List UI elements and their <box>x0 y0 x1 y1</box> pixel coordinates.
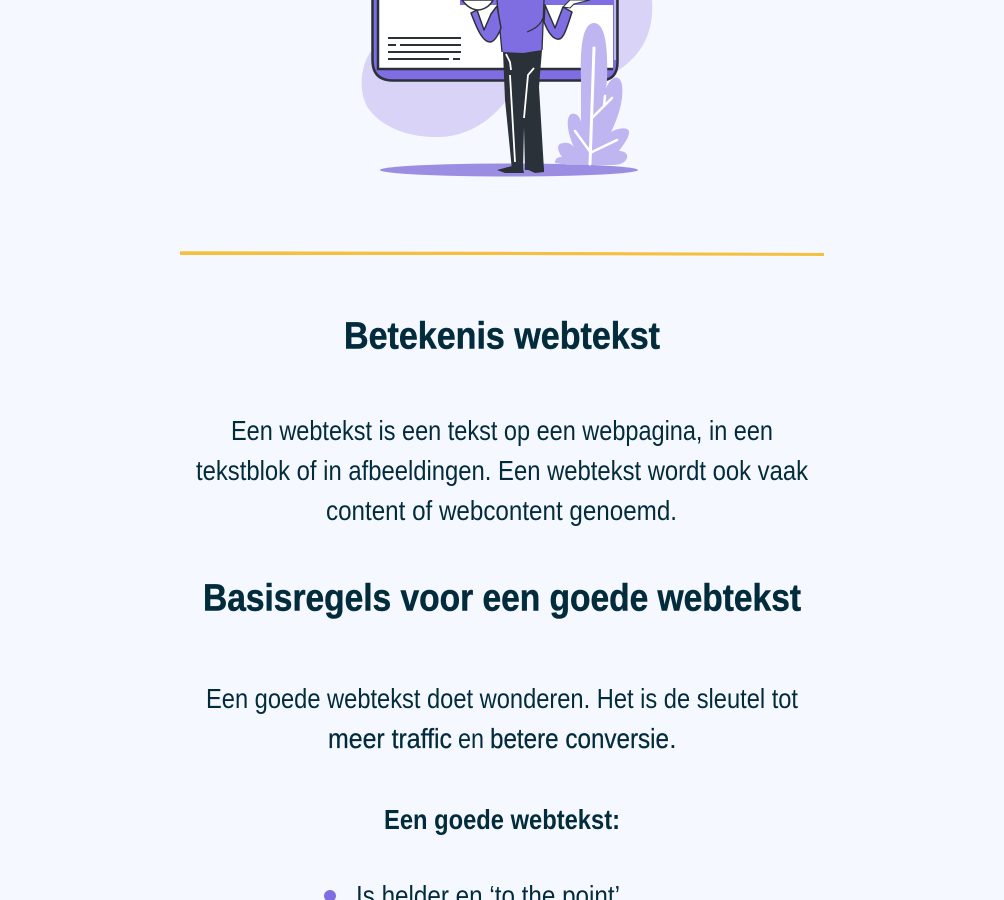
monitor <box>372 0 618 81</box>
bullet item <box>324 880 620 900</box>
paragraph: definition <box>196 415 809 526</box>
yellow divider <box>180 251 824 256</box>
background blobs <box>362 0 652 137</box>
paragraph: introduction: en <box>458 723 484 754</box>
hands <box>462 0 493 10</box>
plant <box>555 23 629 165</box>
shoes <box>497 165 544 173</box>
bullet dot <box>324 890 336 900</box>
paragraph: introduction: meer traffic <box>328 723 452 754</box>
paragraph: introduction: Een goede webtekst doet wonderen. Het is de sleutel tot <box>206 683 798 714</box>
monitor text lines <box>388 38 461 59</box>
ground shadow <box>380 164 638 176</box>
person <box>462 0 590 173</box>
subheading: Een goede webtekst: Een goede webtekst: <box>384 804 620 835</box>
arms <box>471 6 501 42</box>
paragraph: definition: Een webtekst is een tekst op een webpagina, in een <box>231 415 773 446</box>
heading: Basisregels voor een goede webtekst: Basisregels voor een goede webtekst <box>203 578 801 620</box>
legs <box>503 50 544 170</box>
paragraph: introduction: betere conversie <box>490 723 669 754</box>
paragraph: introduction <box>206 683 798 754</box>
trouser highlights <box>506 54 534 162</box>
sweater <box>497 0 544 53</box>
paragraph: definition: tekstblok of in afbeeldingen. Een webtekst wordt ook vaak <box>196 455 809 486</box>
heading: Betekenis webtekst: Betekenis webtekst <box>344 316 660 358</box>
illustration: person in front of screen <box>362 0 652 176</box>
paragraph: definition: content of webcontent genoemd. <box>326 495 677 526</box>
paragraph: introduction: . <box>669 723 677 754</box>
